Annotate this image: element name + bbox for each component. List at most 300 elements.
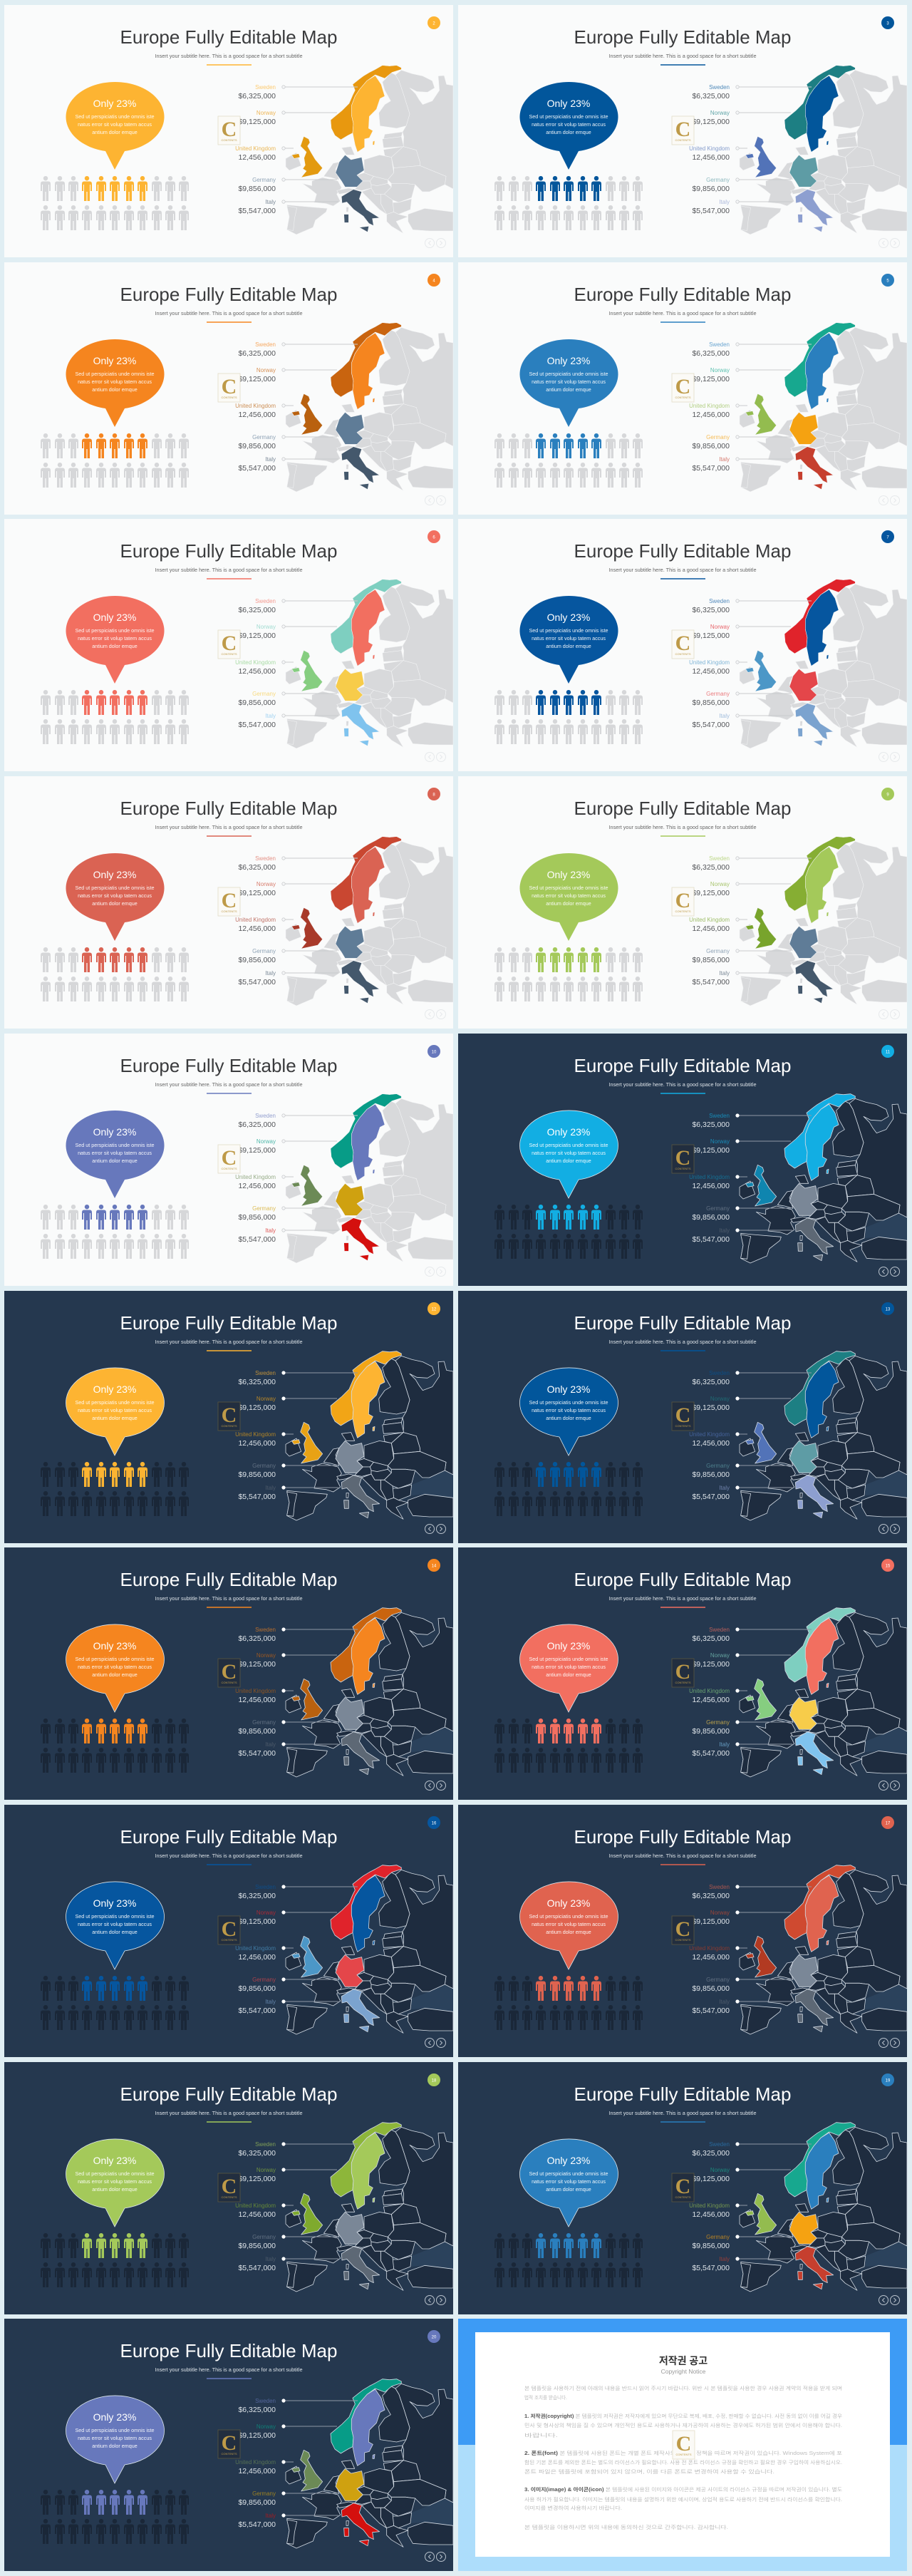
- label: Norway: Norway: [710, 1652, 730, 1659]
- people pictogram: [494, 947, 643, 1001]
- speech bubble: Only 23%: [93, 355, 136, 366]
- label: Italy: [238, 2256, 276, 2272]
- speech bubble: natus error sit volup tatem accus: [532, 892, 606, 899]
- label: Germany: Germany: [706, 1719, 730, 1726]
- label: Germany: [692, 948, 730, 964]
- subtitle: Insert your subtitle here. This is a good space for a short subtitle: [155, 2366, 302, 2373]
- map of Europe: [740, 323, 907, 492]
- label: Germany: $9,856,000: [692, 185, 730, 193]
- people pictogram: [41, 1205, 189, 1259]
- speech bubble: [66, 339, 164, 427]
- label: Norway: Norway: [710, 624, 730, 630]
- subtitle: Insert your subtitle here. This is a good space for a short subtitle: [155, 2110, 302, 2116]
- label: Italy: Italy: [265, 1227, 276, 1234]
- watermark: [218, 116, 240, 145]
- label: Norway: $9,125,000: [692, 118, 730, 126]
- speech bubble: Sed ut perspiciatis unde omnis iste: [529, 1142, 608, 1148]
- label: Italy: Italy: [265, 713, 276, 719]
- title: Europe Fully Editable Map: [120, 1055, 337, 1076]
- speech bubble: Only 23%: [547, 1384, 590, 1395]
- label: Italy: $5,547,000: [238, 2264, 276, 2272]
- subtitle: Insert your subtitle here. This is a good space for a short subtitle: [155, 824, 302, 830]
- label: Sweden: $6,325,000: [692, 606, 730, 614]
- title: Europe Fully Editable Map: [574, 2083, 791, 2105]
- map of Europe: [740, 1865, 907, 2034]
- speech bubble: [66, 2139, 164, 2227]
- title: Europe Fully Editable Map: [574, 1055, 791, 1076]
- speech bubble: Only 23%: [547, 2155, 590, 2166]
- page badge: 3: [886, 21, 889, 26]
- speech bubble: natus error sit volup tatem accus: [532, 121, 606, 128]
- label: Sweden: [692, 598, 730, 614]
- watermark: CONTENTS: [221, 1681, 237, 1684]
- label: Norway: $9,125,000: [238, 889, 276, 897]
- label: United Kingdom: United Kingdom: [235, 917, 276, 923]
- label: Sweden: $6,325,000: [238, 1634, 276, 1643]
- subtitle: Insert your subtitle here. This is a good space for a short subtitle: [155, 310, 302, 316]
- watermark: [218, 2430, 240, 2458]
- label: Norway: [238, 1652, 276, 1669]
- label: Germany: [692, 691, 730, 707]
- label: Italy: Italy: [265, 1485, 276, 1491]
- label: Italy: [238, 1741, 276, 1758]
- notice item 1: [524, 2413, 843, 2438]
- speech bubble: Only 23%: [547, 612, 590, 623]
- label: United Kingdom: United Kingdom: [689, 403, 730, 409]
- speech bubble: natus error sit volup tatem accus: [78, 1150, 152, 1156]
- label: Germany: $9,856,000: [692, 956, 730, 964]
- label: Germany: $9,856,000: [238, 442, 276, 450]
- label: Sweden: [238, 1113, 276, 1129]
- label: Italy: [692, 1999, 730, 2015]
- label: Sweden: $6,325,000: [238, 2406, 276, 2414]
- page badge: [428, 1045, 440, 1058]
- watermark: CONTENTS: [675, 652, 691, 656]
- watermark: C: [222, 118, 237, 141]
- label: Sweden: Sweden: [709, 2141, 730, 2148]
- page badge: 12: [432, 1307, 437, 1312]
- label: Italy: $5,547,000: [238, 978, 276, 986]
- leader lines: [736, 599, 812, 717]
- label: United Kingdom: 12,456,000: [692, 924, 730, 933]
- page badge: 15: [886, 1564, 891, 1568]
- map of Europe: [286, 2123, 453, 2292]
- nav arrows: [879, 1524, 899, 1534]
- watermark: CONTENTS: [675, 1167, 691, 1170]
- label: Norway: [238, 2167, 276, 2183]
- watermark: [218, 630, 240, 659]
- label: United Kingdom: United Kingdom: [235, 2459, 276, 2466]
- label: Norway: $9,125,000: [238, 1146, 276, 1155]
- label: Norway: Norway: [710, 1138, 730, 1145]
- panel: slide 14 orange dark: [4, 1547, 453, 1800]
- label: Italy: Italy: [719, 713, 730, 719]
- label: United Kingdom: [689, 403, 730, 419]
- label: Norway: [692, 110, 730, 126]
- label: Germany: [238, 691, 276, 707]
- page badge: 19: [886, 2078, 891, 2083]
- notice item 2: 폰트 파일은 템플릿에 포함되어 있지 않으며, 이를 다른 폰트로 변경하여 사용할 수 있습니다.: [524, 2468, 774, 2475]
- subtitle: Insert your subtitle here. This is a good space for a short subtitle: [155, 567, 302, 573]
- label: United Kingdom: [689, 145, 730, 162]
- notice item 3: 3. 이미지(image) & 아이콘(icon) 본 템플릿에 사용된 이미지와 아이콘은 제공 사이트의 라이선스 규정을 따르며 저작권이 있습니다. 별도: [524, 2486, 843, 2493]
- panel: slide 15 coral dark: [458, 1547, 907, 1800]
- label: Sweden: Sweden: [709, 1884, 730, 1890]
- leader lines: [282, 2399, 358, 2517]
- label: Norway: $9,125,000: [692, 889, 730, 897]
- label: United Kingdom: United Kingdom: [689, 145, 730, 152]
- page badge: [428, 1816, 440, 1829]
- page badge: [881, 1045, 894, 1058]
- label: Italy: $5,547,000: [692, 207, 730, 215]
- map of Europe: [286, 1094, 453, 1263]
- speech bubble: natus error sit volup tatem accus: [532, 1664, 606, 1670]
- title: Europe Fully Editable Map: [574, 1312, 791, 1334]
- label: Norway: [692, 881, 730, 897]
- label: United Kingdom: 12,456,000: [692, 1696, 730, 1704]
- label: Italy: [238, 1999, 276, 2015]
- label: Norway: $9,125,000: [238, 2431, 276, 2440]
- watermark: C: [222, 2175, 237, 2198]
- label: Germany: Germany: [706, 2234, 730, 2240]
- page badge: [881, 788, 894, 800]
- leader lines: [282, 857, 358, 974]
- speech bubble: natus error sit volup tatem accus: [78, 1921, 152, 1927]
- label: Italy: $5,547,000: [692, 1235, 730, 1244]
- label: Sweden: Sweden: [255, 1370, 276, 1376]
- label: Sweden: [238, 855, 276, 872]
- accent rule: [660, 2121, 705, 2123]
- label: United Kingdom: 12,456,000: [692, 1439, 730, 1448]
- panel: slide 9 green light: [458, 776, 907, 1029]
- speech bubble: antium dolor emque: [92, 1671, 138, 1678]
- accent rule: [207, 835, 252, 837]
- label: Norway: Norway: [256, 367, 276, 373]
- speech bubble: [520, 596, 618, 684]
- label: United Kingdom: 12,456,000: [238, 153, 276, 162]
- subtitle: Insert your subtitle here. This is a good space for a short subtitle: [608, 2110, 757, 2116]
- map of Europe: [286, 2379, 453, 2548]
- label: Germany: [238, 2490, 276, 2507]
- label: Sweden: Sweden: [255, 84, 276, 91]
- panel: slide 11 cyan dark: [458, 1034, 907, 1286]
- panel: slide 10 purple light: [4, 1034, 453, 1286]
- speech bubble: Sed ut perspiciatis unde omnis iste: [529, 1913, 608, 1920]
- watermark: C: [222, 2431, 237, 2455]
- label: Germany: Germany: [252, 1205, 276, 1212]
- leader lines: [282, 2143, 358, 2260]
- speech bubble: Only 23%: [547, 1897, 590, 1909]
- label: Sweden: Sweden: [709, 84, 730, 91]
- label: Sweden: $6,325,000: [238, 1378, 276, 1386]
- label: Italy: Italy: [265, 2256, 276, 2262]
- label: Sweden: $6,325,000: [238, 863, 276, 872]
- leader lines: [736, 857, 812, 974]
- label: Norway: Norway: [256, 2167, 276, 2173]
- speech bubble: Only 23%: [547, 1126, 590, 1138]
- notice item 1: 민사 및 형사상의 책임을 질 수 있으며 개인적인 용도로 사용하거나 재가공하여 사용하는 경우에도 허가된 범위 안에서 이용해야 합니다.: [524, 2422, 842, 2428]
- label: Sweden: [238, 84, 276, 101]
- notice item 1: 바랍니다.: [524, 2432, 558, 2438]
- label: United Kingdom: United Kingdom: [689, 917, 730, 923]
- panel: slide 7 deep blue light: [458, 519, 907, 771]
- label: United Kingdom: 12,456,000: [238, 924, 276, 933]
- speech bubble: Sed ut perspiciatis unde omnis iste: [529, 885, 608, 891]
- label: Italy: $5,547,000: [238, 1493, 276, 1501]
- label: United Kingdom: United Kingdom: [235, 1431, 276, 1438]
- page badge: [881, 1559, 894, 1572]
- label: Italy: $5,547,000: [238, 207, 276, 215]
- label: United Kingdom: 12,456,000: [238, 667, 276, 676]
- watermark: C: [675, 2175, 690, 2198]
- speech bubble: Only 23%: [93, 2411, 136, 2423]
- label: Sweden: [238, 1627, 276, 1643]
- label: Sweden: $6,325,000: [238, 2149, 276, 2158]
- label: Sweden: $6,325,000: [692, 92, 730, 101]
- label: Norway: [692, 1910, 730, 1926]
- page badge: 14: [432, 1564, 437, 1568]
- label: Italy: Italy: [265, 2513, 276, 2519]
- label: United Kingdom: [689, 2203, 730, 2219]
- speech bubble: [66, 1624, 164, 1712]
- label: Norway: [238, 2423, 276, 2440]
- subtitle: Insert your subtitle here. This is a good space for a short subtitle: [155, 1081, 302, 1088]
- panel: slide 20 purple dark: [4, 2319, 453, 2571]
- label: Norway: [692, 624, 730, 640]
- accent rule: [660, 578, 705, 579]
- page badge: [881, 530, 894, 543]
- map of Europe: [740, 579, 907, 748]
- panel: slide 5 blue light: [458, 262, 907, 515]
- label: Germany: [692, 1205, 730, 1222]
- speech bubble: antium dolor emque: [92, 1158, 138, 1164]
- label: Sweden: [238, 2141, 276, 2158]
- label: Italy: $5,547,000: [238, 1749, 276, 1758]
- watermark: [672, 1659, 694, 1687]
- label: Sweden: Sweden: [255, 2141, 276, 2148]
- people pictogram: [41, 433, 189, 488]
- speech bubble: antium dolor emque: [546, 1158, 591, 1164]
- label: Germany: $9,856,000: [692, 1470, 730, 1479]
- label: Italy: $5,547,000: [692, 1749, 730, 1758]
- page badge: 8: [432, 793, 435, 797]
- label: Sweden: Sweden: [255, 855, 276, 862]
- label: Italy: Italy: [719, 1227, 730, 1234]
- speech bubble: antium dolor emque: [546, 386, 591, 393]
- notice item 3: [524, 2486, 843, 2511]
- label: Germany: Germany: [252, 948, 276, 954]
- watermark: [672, 373, 694, 402]
- label: United Kingdom: [235, 2203, 276, 2219]
- speech bubble: natus error sit volup tatem accus: [78, 2435, 152, 2441]
- people pictogram: [494, 2233, 643, 2287]
- watermark: CONTENTS: [221, 138, 237, 142]
- leader lines: [736, 343, 812, 460]
- people pictogram: [494, 1976, 643, 2030]
- panel: slide 18 green dark: [4, 2062, 453, 2314]
- label: Sweden: [692, 2141, 730, 2158]
- page badge: 2: [432, 21, 435, 26]
- title: Europe Fully Editable Map: [574, 1826, 791, 1848]
- people pictogram: [41, 2490, 189, 2544]
- people pictogram: [41, 1976, 189, 2030]
- label: Italy: Italy: [265, 970, 276, 977]
- speech bubble: natus error sit volup tatem accus: [532, 1921, 606, 1927]
- page badge: [428, 2330, 440, 2343]
- label: Italy: [692, 1741, 730, 1758]
- label: Germany: [238, 1463, 276, 1479]
- label: Sweden: Sweden: [709, 1370, 730, 1376]
- notice intro: 법적 조치를 받습니다.: [524, 2394, 567, 2401]
- label: Sweden: Sweden: [255, 1884, 276, 1890]
- watermark: [218, 1402, 240, 1431]
- accent rule: [660, 1607, 705, 1608]
- nav arrows: [425, 2295, 446, 2305]
- leader lines: [282, 1114, 358, 1232]
- label: United Kingdom: [689, 1945, 730, 1962]
- notice item 2: [524, 2450, 843, 2475]
- watermark: CONTENTS: [675, 1938, 691, 1942]
- people pictogram: [494, 690, 643, 744]
- label: Sweden: Sweden: [255, 1627, 276, 1633]
- label: Sweden: $6,325,000: [692, 2149, 730, 2158]
- label: United Kingdom: United Kingdom: [235, 145, 276, 152]
- people pictogram: [41, 690, 189, 744]
- label: Norway: Norway: [256, 1910, 276, 1916]
- speech bubble: natus error sit volup tatem accus: [532, 378, 606, 385]
- label: United Kingdom: United Kingdom: [689, 1945, 730, 1952]
- label: Sweden: $6,325,000: [692, 1378, 730, 1386]
- label: Sweden: [692, 1627, 730, 1643]
- map of Europe: [286, 579, 453, 748]
- speech bubble: antium dolor emque: [546, 900, 591, 907]
- people pictogram: [41, 947, 189, 1001]
- map of Europe: [740, 1094, 907, 1263]
- watermark: [218, 1145, 240, 1173]
- speech bubble: natus error sit volup tatem accus: [78, 1664, 152, 1670]
- watermark: CONTENTS: [675, 910, 691, 913]
- label: Germany: $9,856,000: [692, 2242, 730, 2250]
- people pictogram: [494, 433, 643, 488]
- leader lines: [282, 86, 358, 203]
- subtitle: Insert your subtitle here. This is a good space for a short subtitle: [608, 1595, 757, 1602]
- label: Italy: [692, 713, 730, 729]
- speech bubble: Sed ut perspiciatis unde omnis iste: [529, 113, 608, 120]
- nav arrows: [425, 1267, 446, 1276]
- speech bubble: Sed ut perspiciatis unde omnis iste: [75, 885, 155, 891]
- panel: slide 4 orange light: [4, 262, 453, 515]
- label: Italy: $5,547,000: [238, 2520, 276, 2529]
- label: Norway: $9,125,000: [238, 375, 276, 383]
- title: Europe Fully Editable Map: [120, 26, 337, 48]
- title: Europe Fully Editable Map: [574, 284, 791, 305]
- watermark: C: [222, 1917, 237, 1941]
- label: Norway: $9,125,000: [692, 1403, 730, 1412]
- subtitle: Insert your subtitle here. This is a good space for a short subtitle: [608, 53, 757, 59]
- label: Norway: $9,125,000: [692, 375, 730, 383]
- watermark: [672, 116, 694, 145]
- label: United Kingdom: 12,456,000: [692, 667, 730, 676]
- accent rule: [207, 1864, 252, 1865]
- label: Italy: $5,547,000: [692, 2006, 730, 2015]
- label: Sweden: [238, 1884, 276, 1900]
- watermark: C: [675, 1403, 690, 1427]
- watermark: [672, 630, 694, 659]
- map of Europe: [286, 1865, 453, 2034]
- map of Europe: [286, 837, 453, 1006]
- label: Germany: $9,856,000: [692, 1213, 730, 1222]
- label: Germany: [692, 177, 730, 193]
- label: Sweden: [692, 1113, 730, 1129]
- people pictogram: [41, 176, 189, 230]
- label: Norway: [238, 1910, 276, 1926]
- label: United Kingdom: United Kingdom: [235, 403, 276, 409]
- speech bubble: natus error sit volup tatem accus: [532, 1150, 606, 1156]
- speech bubble: [66, 853, 164, 941]
- label: Germany: Germany: [252, 691, 276, 697]
- watermark: CONTENTS: [221, 396, 237, 399]
- nav arrows: [425, 753, 446, 761]
- label: United Kingdom: 12,456,000: [238, 2210, 276, 2219]
- panel: slide 13 navy dark: [458, 1291, 907, 1543]
- label: United Kingdom: [689, 1688, 730, 1704]
- speech bubble: Sed ut perspiciatis unde omnis iste: [75, 1913, 155, 1920]
- label: Norway: $9,125,000: [692, 1146, 730, 1155]
- speech bubble: Only 23%: [93, 869, 136, 880]
- map of Europe: [286, 1608, 453, 1777]
- subtitle: Insert your subtitle here. This is a good space for a short subtitle: [608, 1853, 757, 1859]
- accent rule: [660, 835, 705, 837]
- label: Sweden: [692, 84, 730, 101]
- watermark: [672, 887, 694, 916]
- nav arrows: [425, 496, 446, 505]
- label: Italy: Italy: [265, 199, 276, 205]
- label: Germany: Germany: [706, 691, 730, 697]
- label: Italy: Italy: [265, 1999, 276, 2005]
- label: Norway: [238, 881, 276, 897]
- label: Sweden: $6,325,000: [692, 349, 730, 358]
- nav arrows: [879, 238, 899, 248]
- label: Germany: [238, 1205, 276, 1222]
- speech bubble: Only 23%: [547, 869, 590, 880]
- label: United Kingdom: [235, 145, 276, 162]
- label: United Kingdom: United Kingdom: [235, 1174, 276, 1180]
- watermark: CONTENTS: [675, 138, 691, 142]
- panel: slide 19 blue dark: [458, 2062, 907, 2314]
- label: United Kingdom: United Kingdom: [689, 1431, 730, 1438]
- label: Sweden: $6,325,000: [238, 349, 276, 358]
- title: Europe Fully Editable Map: [120, 540, 337, 562]
- label: Norway: Norway: [710, 1910, 730, 1916]
- label: Norway: Norway: [256, 624, 276, 630]
- label: Sweden: $6,325,000: [692, 1892, 730, 1900]
- label: Sweden: $6,325,000: [238, 1892, 276, 1900]
- watermark: C: [675, 375, 690, 398]
- label: Germany: [238, 434, 276, 450]
- label: Norway: [692, 1138, 730, 1155]
- page badge: [428, 788, 440, 800]
- speech bubble: Sed ut perspiciatis unde omnis iste: [75, 113, 155, 120]
- map of Europe: [740, 2123, 907, 2292]
- label: Sweden: [692, 1370, 730, 1386]
- label: Sweden: Sweden: [255, 2398, 276, 2404]
- nav arrows: [879, 1267, 899, 1276]
- watermark: [673, 2431, 695, 2459]
- label: Germany: [238, 1977, 276, 1993]
- notice item 2: 함된 기본 폰트를 제외한 폰트는 별도의 라이선스가 필요합니다. 사용 전 폰트 라이선스 규정을 확인하고 필요한 경우 구입하여 사용하십시오.: [524, 2459, 842, 2466]
- label: United Kingdom: [689, 1174, 730, 1190]
- label: Germany: Germany: [252, 2234, 276, 2240]
